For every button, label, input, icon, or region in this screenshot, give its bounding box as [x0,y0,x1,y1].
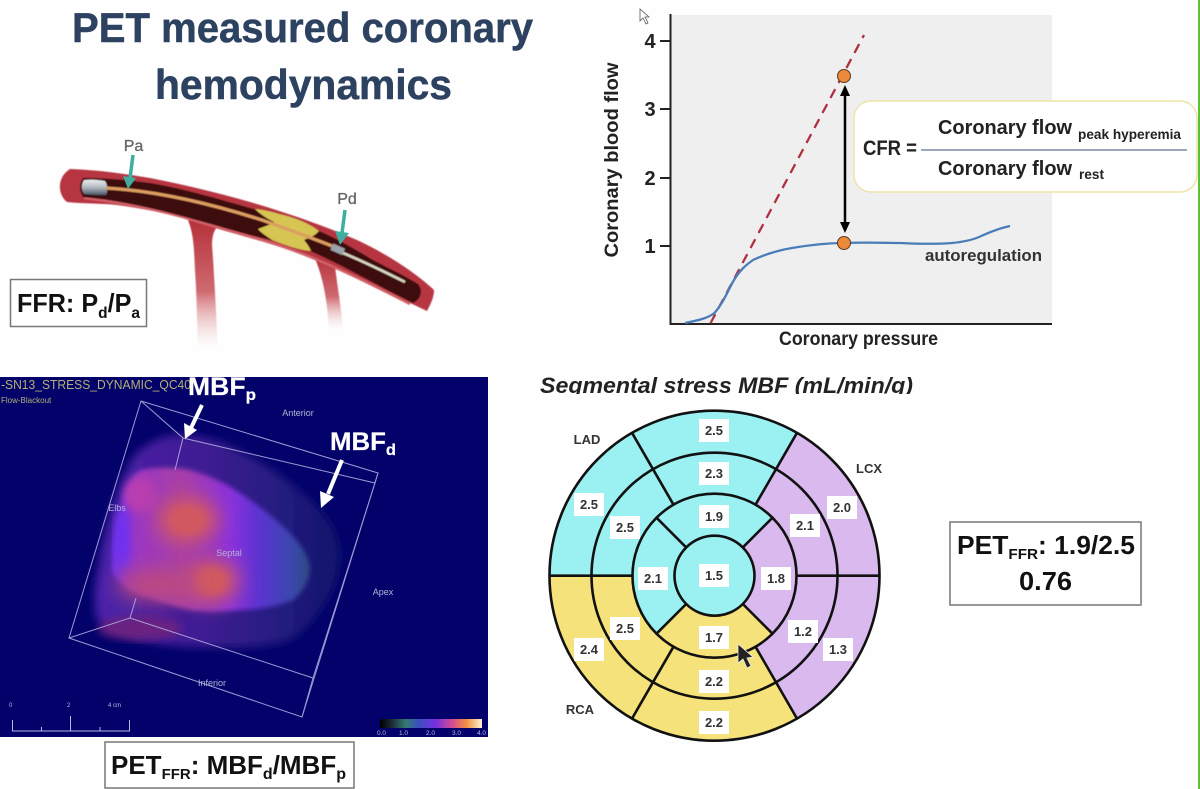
autoregulation curve [685,226,1010,323]
segment values [574,419,857,734]
PET FFR result box: PET [957,530,1008,560]
outer sectors [550,411,880,741]
y tick labels: 1 [644,236,656,258]
blue basal region [114,508,130,568]
lumen [80,178,421,303]
vessel wall [60,169,434,311]
arrow: MBFp [184,405,202,439]
colour bar: 0.0 [377,730,386,737]
y tick labels: 4 [644,31,656,53]
magenta upper left rim [124,477,156,513]
orientation labels: Septal [216,548,242,558]
PET FFR result box: FFR [1008,546,1038,563]
segment values: 2.5 [580,497,598,512]
orientation labels: Elbs [108,503,126,513]
wireframe box [69,401,378,717]
scale bar [9,703,130,731]
FFR formula box [10,280,146,326]
double arrow [840,85,850,233]
label: MBFd: MBF [330,428,384,456]
orientation labels: Anterior [282,408,314,418]
title: PET measured coronary [72,4,534,51]
hot spot upper [158,498,218,542]
label and arrow: Pd [335,191,357,245]
middle perfusion region [112,468,310,612]
icon: mouse cursor on chart [738,644,753,668]
FFR formula box: /P [108,288,131,318]
side branch left [188,220,218,350]
screen edge line [1198,0,1200,789]
segment lines [550,411,880,741]
arrow: MBFd [320,460,342,508]
FFR formula box: d [98,305,108,322]
CFR formula callout: Coronary flow [938,117,1072,139]
plot background [671,15,1052,323]
image background [0,377,488,737]
hyperemia dashed line [711,35,864,323]
territory labels: RCA [566,702,595,717]
PET FFR result box [950,522,1141,605]
territory labels: LCX [856,461,882,476]
colour bar: 4.0 [477,730,486,737]
PET FFR formula box: /MBF [273,750,336,780]
scale bar: 4 cm [108,703,121,709]
segment values: 2.3 [705,466,723,481]
icon: mouse cursor top [640,9,649,24]
segment values: 2.5 [616,621,634,636]
FFR formula box: FFR: P [17,288,101,318]
segment values: 2.2 [705,715,723,730]
orientation labels: Apex [373,587,394,597]
label and arrow: Pa: Pa [124,138,143,155]
catheter tip [82,180,107,195]
PET FFR formula box: FFR [162,766,191,783]
y axis title: Coronary blood flow [602,62,623,258]
label and arrow: Pa [123,138,143,189]
guide wire [106,188,332,246]
segment values: 2.1 [644,571,662,586]
x axis title: Coronary pressure [779,329,938,350]
segment values: 1.9 [705,509,723,524]
outer myocardium glow [95,435,340,647]
segment values: 2.5 [616,520,634,535]
segment values: 1.7 [705,630,723,645]
hot spot lower [186,560,238,602]
segment values: 2.4 [580,642,599,657]
scan header text: -SN13_STRESS_DYNAMIC_QC40 [1,378,191,392]
inner ring sectors [633,494,797,658]
PET 3D flow image [0,377,488,737]
lower rim [98,616,182,640]
chart: coronary blood flow vs pressure [602,14,1052,350]
lower pink region [117,569,197,601]
scale bar: 0 [9,703,13,709]
label: MBFd: d [386,442,396,459]
FFR formula box: a [131,305,140,322]
PET FFR formula box: p [336,766,346,783]
segment values: 1.8 [767,571,785,586]
PET 3D flow image: Flow-Blackout [1,396,52,405]
label: MBFp: MBF [188,373,242,401]
segment values: 2.1 [796,518,814,533]
segment values: 1.3 [829,642,847,657]
peak hyperemia point [838,70,850,82]
rest point [838,236,850,250]
PET FFR formula box: d [263,766,273,783]
pressure sensor [330,243,345,255]
PET FFR formula box: PET [111,750,162,780]
title: hemodynamics [155,61,452,108]
PET FFR result box: : 1.9/2.5 [1038,530,1135,560]
colour bar: 2.0 [426,730,435,737]
CFR formula callout: rest [1079,166,1104,182]
PET FFR formula box: : MBF [191,750,263,780]
territory labels: LAD [574,432,600,447]
PET FFR formula box [105,742,354,788]
segment values: 1.2 [794,624,812,639]
axes [660,14,1052,324]
lower wall highlight [84,198,410,304]
illustration: coronary artery with pressure wire [60,169,434,350]
colour bar: 1.0 [399,730,408,737]
pressure sensor wire tip [343,253,405,282]
scale bar: 2 [67,703,71,709]
title [72,4,534,108]
segment values: 2.0 [833,500,851,515]
side branch right [314,256,343,330]
label: MBFp: p [246,387,256,404]
autoregulation label: autoregulation [925,246,1042,265]
CFR formula callout: Coronary flow [938,158,1072,180]
label and arrow: Pd: Pd [337,191,357,208]
segment values: 2.5 [705,423,723,438]
plaque [255,209,319,251]
orientation labels [108,408,394,688]
chart: polar bullseye map [550,411,882,741]
PET FFR result box: 0.76 [1019,566,1072,596]
colour bar: 3.0 [452,730,461,737]
heading: segmental stress MBF: Segmental stress MBF (mL/min/g) [540,373,913,398]
segment values: 2.2 [705,674,723,689]
orientation labels: Inferior [198,678,226,688]
CFR formula callout: peak hyperemia [1078,126,1181,142]
y tick labels: 3 [644,99,656,121]
territory labels [566,432,882,717]
apex circle [674,536,754,616]
segment values: 1.5 [705,568,723,583]
y tick labels: 2 [644,168,656,190]
y tick labels [644,31,656,258]
CFR formula callout: CFR = [863,137,917,160]
CFR formula callout [854,101,1197,192]
colour bar [377,719,486,735]
